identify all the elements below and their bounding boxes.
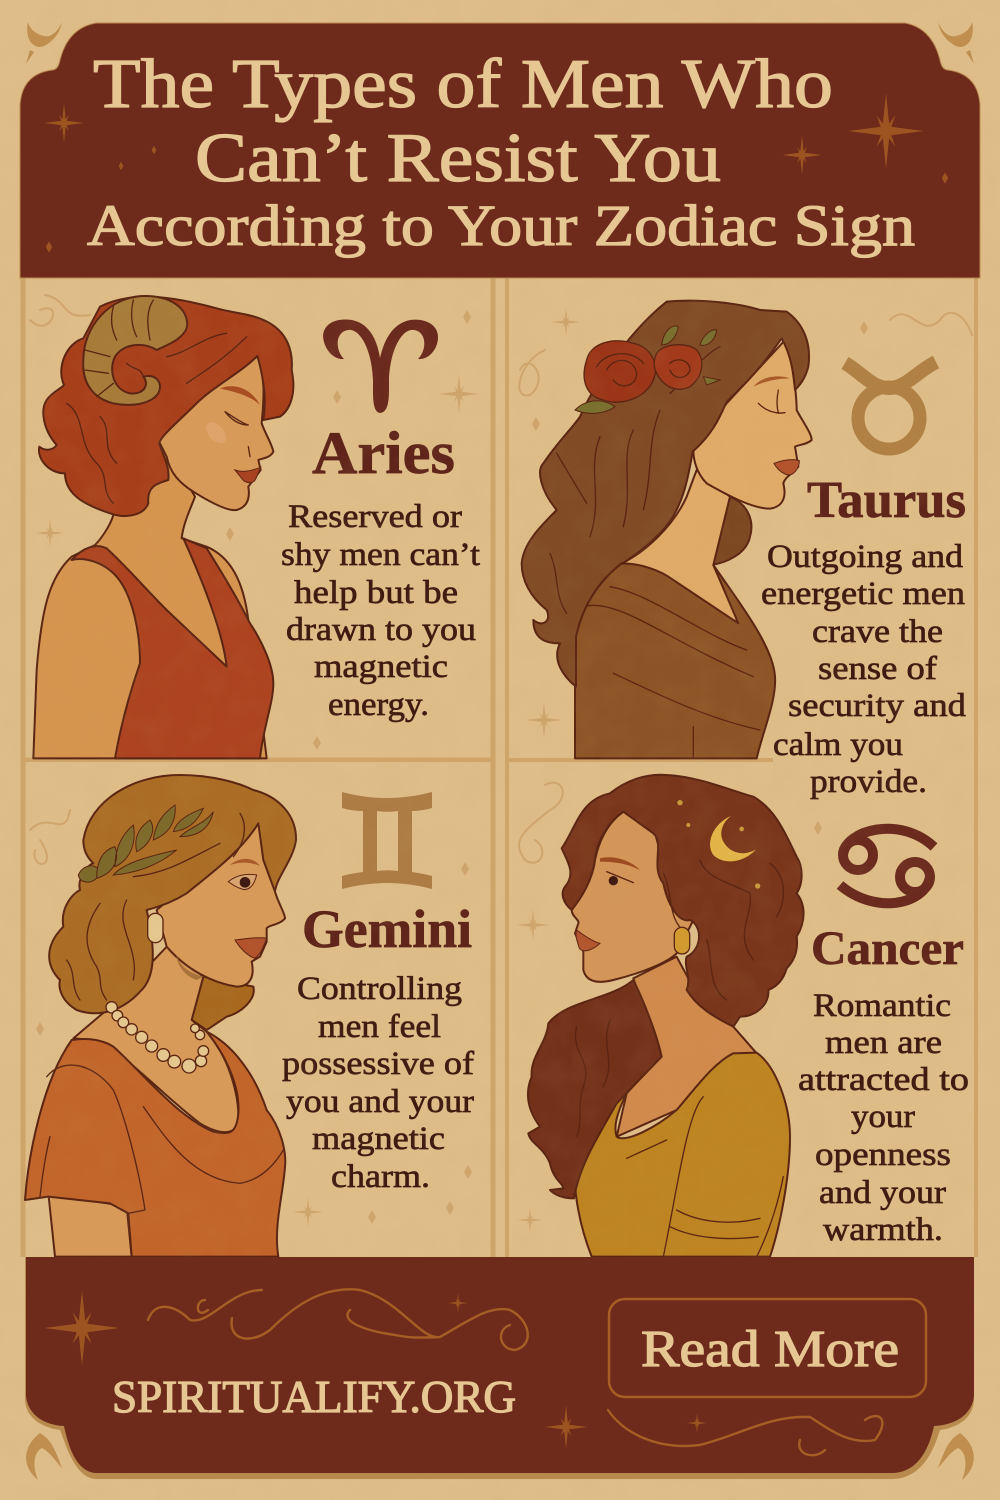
pearl necklace (106, 1002, 209, 1073)
panel: Cancer (507, 760, 979, 1257)
background swirl (519, 313, 972, 395)
text: Cancer description (798, 988, 969, 1248)
text: Cancer description: Romantic (813, 988, 951, 1024)
text: Cancer description: men are (825, 1025, 942, 1061)
panel: Taurus (507, 278, 979, 800)
figure: Cancer woman (528, 775, 804, 1257)
text: Gemini description: possessive of (282, 1046, 474, 1082)
text: Taurus description: energetic men (761, 576, 965, 612)
text: Cancer description: openness (815, 1137, 951, 1173)
text: Aries description: shy men can’t (281, 537, 480, 573)
roses (575, 326, 720, 413)
text: Gemini description: you and your (286, 1084, 474, 1120)
text: Aries description: drawn to you (286, 612, 476, 648)
Read More button: Read More (641, 1321, 899, 1378)
website label: SPIRITUALIFY.ORG (112, 1371, 516, 1422)
text: Gemini description: men feel (318, 1009, 441, 1045)
footer banner (25, 1257, 974, 1479)
figure: Taurus woman (522, 301, 812, 758)
text: Cancer description: attracted to (798, 1062, 969, 1098)
background swirl (30, 295, 90, 326)
background sparkles (526, 308, 868, 738)
background swirl (519, 783, 563, 863)
icon: Gemini symbol (342, 792, 432, 889)
text: Cancer description: warmth. (823, 1212, 943, 1248)
text: Gemini description (282, 971, 474, 1195)
background sparkles (517, 821, 822, 1233)
heading: Cancer: Cancer (811, 922, 964, 975)
heading: Aries: Aries (312, 420, 455, 486)
figure: Gemini woman (25, 775, 296, 1257)
text: Gemini description: Controlling (297, 971, 462, 1007)
text: Aries description: help but be (294, 575, 458, 611)
background swirl (30, 810, 70, 864)
title: The Types of Men Who (93, 46, 833, 123)
text: Taurus description (761, 539, 967, 800)
panel: Gemini (20, 760, 493, 1257)
text: Taurus description: crave the (812, 614, 943, 650)
text: Cancer description: and your (819, 1175, 946, 1211)
crescent moon (710, 816, 756, 861)
background sparkles (36, 310, 479, 750)
laurel wreath (78, 805, 213, 882)
background sparkles (36, 862, 472, 1227)
text: Taurus description: sense of (818, 651, 937, 687)
text: Taurus description: calm you (773, 727, 903, 763)
header banner (20, 23, 980, 278)
icon: Taurus symbol (845, 362, 936, 449)
Read More button (609, 1299, 926, 1397)
decorative stars (44, 93, 948, 253)
text: Gemini description: charm. (331, 1159, 430, 1195)
text: Aries description: energy. (328, 687, 429, 723)
text: Cancer description: your (851, 1099, 915, 1135)
text: Taurus description: Outgoing and (767, 539, 964, 575)
icon: Aries symbol (323, 320, 438, 413)
text: Aries description (281, 499, 480, 723)
text: Gemini description: magnetic (312, 1121, 445, 1157)
text: Aries description: magnetic (314, 649, 448, 685)
text: Taurus description: provide. (810, 764, 927, 800)
heading: Taurus: Taurus (807, 472, 966, 529)
decorative flourishes (44, 1289, 882, 1455)
title: Can’t Resist You (195, 120, 721, 197)
title (87, 46, 915, 258)
text: Taurus description: security and (788, 688, 967, 724)
icon: Cancer symbol (840, 829, 934, 903)
heading: Gemini: Gemini (302, 899, 472, 959)
text: Aries description: Reserved or (288, 499, 462, 535)
panel: Aries (20, 278, 493, 760)
title: According to Your Zodiac Sign (87, 193, 915, 258)
figure: Aries woman (33, 296, 293, 758)
